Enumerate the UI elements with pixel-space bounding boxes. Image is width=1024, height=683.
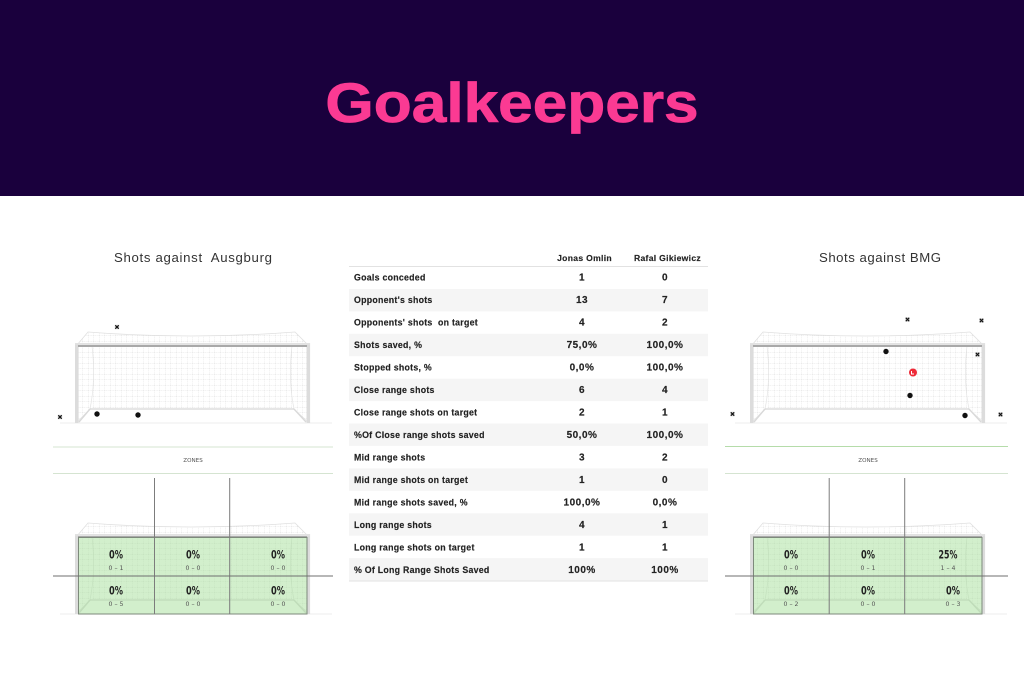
row bands (349, 289, 708, 580)
table header: Jonas Omlin (557, 253, 612, 263)
right panel: shots against BMG (725, 250, 1008, 614)
right zones heading: ZONES (858, 458, 878, 464)
right goal shot map (730, 317, 1007, 423)
table rows: 2 (579, 408, 585, 418)
header banner (0, 0, 1024, 196)
left zone values: 0% (271, 548, 285, 562)
right panel heading: Shots against BMG (819, 250, 941, 265)
left zone values: 0% (186, 584, 200, 598)
table rows: 1 (579, 272, 585, 284)
table rows: 0,0% (570, 362, 594, 374)
table rows: Stopped shots, % (354, 362, 432, 372)
table rows: Opponent's shots (354, 295, 433, 305)
right zone values: 0 – 2 (784, 601, 799, 608)
table rows: 100,0% (647, 362, 683, 374)
table rows: 2 (662, 452, 668, 464)
right zone values: 25% (938, 548, 958, 562)
table rows: 100,0% (647, 430, 683, 441)
table rows: Shots saved, % (354, 340, 422, 350)
table rows (354, 272, 683, 576)
table rows: 100% (568, 565, 596, 576)
right zone values: 0 – 1 (861, 565, 876, 572)
left zone values: 0% (109, 584, 123, 598)
table rows: % Of Long Range Shots Saved (354, 565, 490, 575)
table rows: Close range shots (354, 385, 435, 395)
table rows: 1 (579, 542, 585, 554)
table rows: 75,0% (567, 340, 597, 351)
right zone values: 0% (946, 584, 960, 598)
table rows: Long range shots on target (354, 542, 475, 552)
left zone values: 0 – 5 (109, 601, 124, 608)
table rows: 7 (662, 295, 668, 306)
table rows: Long range shots (354, 520, 432, 530)
left zones grid (53, 478, 333, 614)
table rows: Mid range shots on target (354, 475, 468, 485)
table rows: 100% (651, 565, 679, 576)
right zone values: 0 – 0 (861, 601, 876, 608)
right zone values (784, 548, 961, 608)
left zone values (109, 548, 286, 608)
table rows: 0,0% (653, 498, 677, 508)
left panel heading: Shots against Ausgburg (114, 250, 272, 265)
table rows: 1 (662, 408, 668, 418)
left zone values: 0% (271, 584, 285, 598)
table header (557, 253, 701, 263)
left shot markers (58, 325, 141, 419)
table rows: 4 (579, 318, 585, 328)
stats table (349, 253, 708, 581)
left zone values: 0 – 0 (186, 601, 201, 608)
table rows: 4 (662, 385, 668, 396)
table rows: %Of Close range shots saved (354, 430, 485, 440)
table rows: Close range shots on target (354, 408, 477, 418)
left zone values: 0 – 0 (186, 565, 201, 572)
table rows: 13 (576, 295, 588, 306)
table rows: Goals conceded (354, 272, 426, 282)
right zone values: 0% (861, 584, 875, 598)
left zone values: 0 – 0 (271, 601, 286, 608)
table rows: Mid range shots (354, 452, 425, 462)
title: Goalkeepers (325, 71, 699, 134)
table rows: 0 (662, 475, 668, 486)
right shot markers (730, 317, 1003, 418)
right zone values: 0 – 3 (946, 601, 961, 608)
right zone values: 1 – 4 (941, 565, 956, 572)
left panel: shots against Augsburg (53, 250, 333, 614)
right zone values: 0% (784, 584, 798, 598)
table rows: 2 (662, 318, 668, 328)
table rows: 4 (579, 520, 585, 531)
right zones grid (725, 478, 1008, 614)
table rows: Opponents' shots on target (354, 318, 478, 328)
table header: Rafal Gikiewicz (634, 253, 701, 263)
left zone values: 0% (109, 548, 123, 562)
table rows: 3 (579, 452, 585, 464)
table rows: Mid range shots saved, % (354, 498, 468, 508)
left zones heading: ZONES (183, 458, 203, 464)
table rows: 0 (662, 272, 668, 284)
left zone values: 0 – 1 (109, 565, 124, 572)
right zone values: 0% (784, 548, 798, 562)
table rows: 100,0% (647, 340, 683, 351)
table rows: 1 (662, 542, 668, 554)
right zone values: 0 – 0 (784, 565, 799, 572)
table rows: 6 (579, 385, 585, 396)
table rows: 1 (662, 520, 668, 531)
left goal shot map (58, 325, 332, 423)
left zone values: 0 – 0 (271, 565, 286, 572)
table rows: 1 (579, 475, 585, 486)
left zone values: 0% (186, 548, 200, 562)
left zones heading (53, 447, 333, 474)
table rows: 50,0% (567, 430, 597, 441)
right zone values: 0% (861, 548, 875, 562)
table rows: 100,0% (564, 498, 600, 508)
